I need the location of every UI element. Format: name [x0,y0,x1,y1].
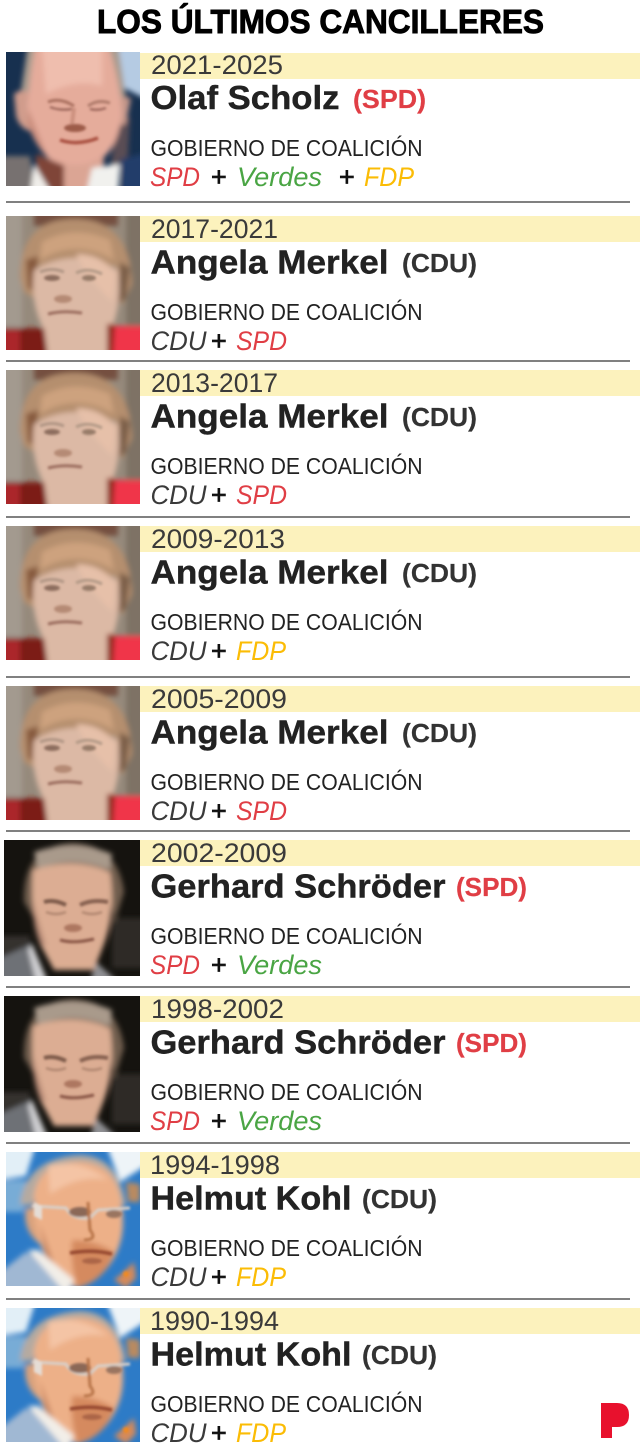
coalition parties: Verdes [237,950,322,980]
year band [140,1152,640,1178]
years: 2017-2021 [151,214,278,244]
coalition label: GOBIERNO DE COALICIÓN [150,609,422,635]
panel: Angela Merkel 2017-2021 [0,208,640,358]
years: 2002-2009 [151,838,287,868]
years: 1998-2002 [151,994,284,1024]
coalition parties: SPD [236,326,287,356]
panel: Angela Merkel 2009-2013 [0,518,640,668]
coalition parties: CDU [150,480,207,510]
panel: Olaf Scholz 2021-2025 [0,44,640,194]
portrait: Angela Merkel [0,678,148,828]
coalition parties: Verdes [237,162,322,192]
coalition parties: CDU [150,636,207,666]
coalition label: GOBIERNO DE COALICIÓN [150,453,422,479]
coalition parties: CDU [150,796,207,826]
coalition parties: + [211,326,227,356]
panel: Helmut Kohl 1990-1994 [0,1300,640,1450]
coalition parties: Verdes [237,1106,322,1136]
party: (CDU) [402,558,477,588]
party: (CDU) [402,248,477,278]
coalition parties: + [211,796,227,826]
portrait: Olaf Scholz [0,44,148,194]
portrait: Helmut Kohl [0,1144,148,1294]
panel: Angela Merkel 2005-2009 [0,678,640,828]
coalition label: GOBIERNO DE COALICIÓN [150,299,422,325]
coalition parties: CDU [150,326,207,356]
party: (CDU) [402,402,477,432]
name: Angela Merkel [150,244,388,280]
coalition parties: + [211,162,227,192]
year band [140,53,640,79]
coalition parties [150,1106,322,1136]
panel: Gerhard Schröder 1998-2002 [0,994,640,1138]
coalition parties: + [211,1106,227,1136]
coalition parties: + [339,162,355,192]
party: (SPD) [456,1028,527,1058]
portrait: Angela Merkel [0,362,148,512]
year band [140,370,640,396]
coalition parties [150,796,287,826]
coalition label: GOBIERNO DE COALICIÓN [150,1235,422,1261]
name: Gerhard Schröder [150,1024,446,1060]
coalition parties: CDU [150,1418,207,1448]
coalition parties: SPD [236,796,287,826]
coalition parties: FDP [236,1262,286,1292]
coalition parties: + [211,1418,227,1448]
years: 1990-1994 [150,1306,279,1336]
coalition parties [150,636,286,666]
coalition parties: FDP [364,162,414,192]
coalition label: GOBIERNO DE COALICIÓN [150,769,422,795]
coalition parties: SPD [236,480,287,510]
coalition parties: SPD [150,162,200,192]
coalition parties [150,480,287,510]
coalition parties: + [211,636,227,666]
years: 2009-2013 [151,524,285,554]
coalition label: GOBIERNO DE COALICIÓN [150,1079,422,1105]
coalition parties [150,1418,286,1448]
year band [140,1308,640,1334]
name: Angela Merkel [150,554,388,590]
coalition parties: FDP [236,636,286,666]
portrait: Angela Merkel [0,208,148,358]
portrait: Gerhard Schröder [0,840,146,982]
coalition parties [150,950,322,980]
coalition label: GOBIERNO DE COALICIÓN [150,923,422,949]
portrait: Helmut Kohl [0,1300,148,1450]
year band [140,686,640,712]
coalition parties [150,1262,286,1292]
panel: Helmut Kohl 1994-1998 [0,1144,640,1294]
year band [140,216,640,242]
icon: publisher logo [601,1403,629,1438]
name: Gerhard Schröder [150,868,446,904]
name: Helmut Kohl [150,1180,352,1216]
coalition parties: CDU [150,1262,207,1292]
portrait: Gerhard Schröder [0,996,146,1138]
coalition parties: + [211,480,227,510]
years: 1994-1998 [150,1150,280,1180]
coalition label: GOBIERNO DE COALICIÓN [150,1391,422,1417]
coalition parties: SPD [150,950,200,980]
years: 2013-2017 [151,368,278,398]
name: Olaf Scholz [150,79,340,116]
name: Helmut Kohl [150,1336,352,1372]
panel: Angela Merkel 2013-2017 [0,362,640,512]
years: 2021-2025 [151,50,283,80]
party: (CDU) [362,1184,437,1214]
coalition parties: SPD [150,1106,200,1136]
party: (SPD) [353,84,426,114]
party: (CDU) [362,1340,437,1370]
portrait: Angela Merkel [0,518,148,668]
name: Angela Merkel [150,714,388,750]
years: 2005-2009 [151,684,287,714]
coalition parties: + [211,950,227,980]
coalition parties: FDP [236,1418,286,1448]
party: (SPD) [456,872,527,902]
year band [140,526,640,552]
name: Angela Merkel [150,398,388,434]
title: LOS ÚLTIMOS CANCILLERES [97,3,544,40]
year band [140,840,640,866]
panel: Gerhard Schröder 2002-2009 [0,838,640,982]
coalition parties: + [211,1262,227,1292]
coalition parties [150,326,287,356]
party: (CDU) [402,718,477,748]
coalition parties [150,162,414,192]
coalition label: GOBIERNO DE COALICIÓN [150,135,422,161]
year band [140,996,640,1022]
